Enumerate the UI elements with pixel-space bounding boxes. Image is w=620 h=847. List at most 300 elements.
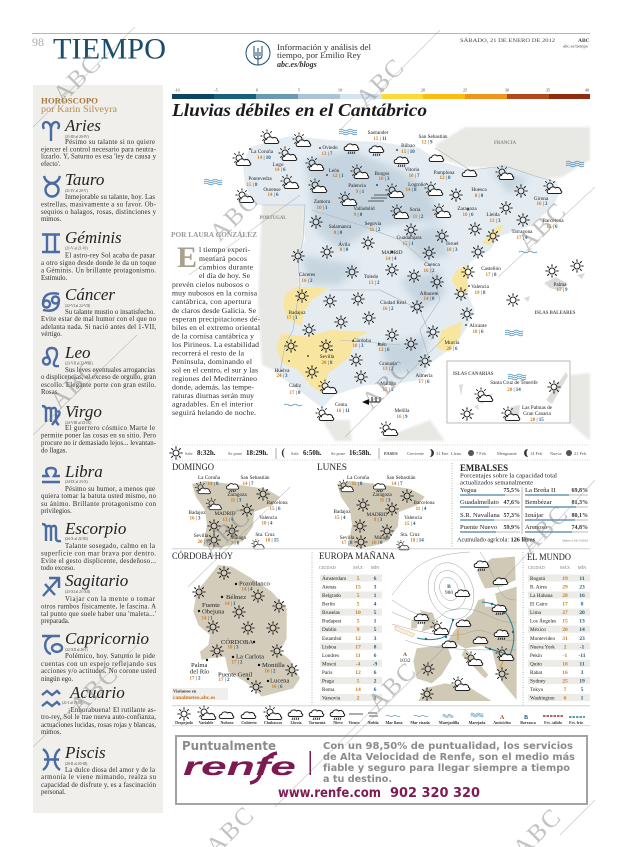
el mundo table: 14: [579, 627, 585, 633]
lunes labels: Málaga: [374, 535, 390, 541]
embalses subtitle: Porcentajes sobre la capacidad total: [460, 472, 557, 480]
embalses table: 74,8%: [572, 525, 588, 531]
main weather map of Spain: [204, 127, 590, 441]
map: cloud shading: [300, 150, 530, 375]
sign: Virgo: Virgo: [65, 402, 102, 421]
cordoba heading: CÓRDOBA HOY: [172, 550, 233, 562]
article text: cambios durante: [199, 262, 254, 272]
map: sea labels: [259, 141, 576, 316]
el mundo table: Sydney: [530, 678, 546, 684]
map: city labels: 13 | 2: [382, 367, 394, 372]
map: city labels: MADRID: [381, 250, 403, 256]
date block: ABC: [578, 38, 590, 44]
embalses table: [460, 487, 588, 534]
article text: [172, 245, 260, 417]
europa table: 5: [357, 593, 360, 599]
map: city labels: 15 | 10: [401, 150, 415, 155]
europe lens: [395, 626, 415, 637]
ad tagline: Puntualmente: [182, 739, 276, 753]
sign: Escorpio: (24-X al 22-XI): [65, 537, 89, 541]
cordoba labels: 17 | 2: [189, 676, 201, 682]
europa table: Budapest: [322, 619, 342, 625]
sign: Geminis: Géminis: [65, 228, 122, 247]
lunes labels: 15 | 4: [334, 516, 346, 521]
map: city labels: Ourense: [263, 187, 281, 193]
el mundo table: 3: [581, 670, 584, 676]
panel: horoscope: [33, 85, 163, 813]
map: city labels: Huesca: [471, 187, 487, 193]
ABC watermarks: ABC: [363, 657, 423, 717]
article text: Península, dominando el: [172, 357, 252, 366]
map: city labels: 14 | 0: [423, 297, 435, 302]
map: city labels: Tarragona: [512, 229, 533, 235]
lunes labels: Sta. Cruz: [400, 532, 420, 538]
sun and moon strip: 16:58h.: [349, 449, 371, 457]
article text: agradables. En el interior: [172, 400, 253, 408]
el mundo table: 8: [581, 602, 584, 608]
lunes labels: 14 | 7: [391, 482, 403, 487]
sun and moon strip: 8:32h.: [197, 449, 216, 457]
cordoba labels: CÓRDOBA: [221, 638, 253, 646]
sign: Aries: [41, 116, 157, 168]
map: city labels: Bilbao: [401, 143, 415, 149]
sign: Leo: Sus leves eventuales arrogancias: [65, 367, 155, 374]
domingo labels: La Coruña: [198, 475, 221, 481]
el mundo table: Bogotá: [530, 576, 546, 582]
cordoba icons: [192, 566, 299, 694]
map: city labels: 12 | 1: [332, 174, 344, 179]
map: city labels: Sevilla: [320, 354, 335, 360]
sign: Geminis: (21-V al 21-VI): [65, 246, 88, 250]
legend of symbols: Anticiclón: [493, 720, 512, 725]
map: city labels: 17 | 9: [556, 288, 568, 293]
callout: canal meteo: [172, 688, 228, 701]
icon: fog lines: [368, 195, 390, 201]
article text: el día de hoy. Se: [199, 271, 251, 280]
sun and moon strip: Se pone: [331, 451, 345, 456]
map: city labels: 17 | 8: [485, 273, 497, 278]
el mundo table: 28: [562, 593, 568, 599]
cordoba labels: 18 | 3: [227, 646, 239, 650]
cordoba labels: 16 | 2: [264, 670, 276, 674]
map: city labels: Albacete: [420, 291, 439, 297]
domingo labels: Valencia: [259, 515, 278, 521]
europa table: MÍN: [371, 565, 379, 570]
sign: Leo: Rosas.: [41, 389, 59, 396]
sign: Capricornio: (22-XII al 20-I): [65, 648, 88, 652]
cordoba labels: 14 | 1: [224, 602, 236, 607]
sign: Virgo: [41, 402, 157, 454]
panel: Cordoba hoy: [172, 550, 300, 701]
sign: Sagitario: tal punto que suele haber una 'maleta...': [41, 611, 156, 618]
embalses table: Iznájar: [525, 512, 544, 519]
sun and moon strip: Creciente: [407, 451, 424, 456]
date block: [460, 36, 590, 48]
map: city labels: Guadalajara: [396, 235, 422, 241]
sign: Tauro: Inmejorable su talante, hoy. Las: [65, 194, 155, 201]
lunes labels: Sevilla: [340, 535, 355, 541]
sign: Cancer: Su talante mustio o insatisfecho.: [65, 309, 155, 316]
el mundo table: 15: [562, 619, 568, 625]
el mundo table: Washington: [530, 696, 555, 702]
map: city labels: Ceuta: [335, 402, 348, 408]
el mundo table: 16: [562, 670, 568, 676]
map: city labels: 16 | 11: [336, 409, 350, 414]
legend of symbols: Frt. cálido: [544, 720, 562, 725]
europe pressure labels: 1032: [400, 658, 411, 664]
article text: sol en el centro, el sur y las: [172, 366, 258, 374]
embalses total: [457, 536, 588, 544]
europa table: Estambul: [322, 636, 342, 642]
embalses table: 75,5%: [504, 488, 520, 494]
domingo labels: Badajoz: [188, 510, 206, 516]
map: city labels: San Sebastián: [419, 134, 448, 140]
lunes labels: [334, 475, 435, 546]
domingo labels: MADRID: [214, 511, 236, 517]
el mundo table: 11: [579, 661, 585, 667]
sign: Tauro: [41, 170, 157, 223]
el mundo table: 16: [579, 593, 585, 599]
temperature colour scale: 10: [338, 88, 342, 92]
date block: abc.es/tiempo: [563, 44, 589, 48]
sign: Tauro: (21-IV al 20-V): [65, 189, 88, 193]
sign: Leo: o displicencias, el exceso de orgullo, gran: [41, 374, 157, 381]
map: city labels: Segovia: [365, 221, 382, 227]
sign: Geminis: [41, 228, 156, 282]
ABC watermarks: ABC: [205, 187, 265, 247]
europa table: 5: [374, 627, 377, 633]
map: city labels: 13 | 6: [378, 348, 390, 353]
map: city labels: 8 | 0: [475, 194, 484, 199]
map: city labels: 14 | 6: [267, 193, 279, 198]
lunes labels: 17 | 8: [341, 541, 353, 546]
icon: wind arrow: [362, 397, 380, 405]
map: city labels: Vitoria: [405, 167, 420, 173]
sign: Tauro: sequios o halagos, rosas, distinciones y: [41, 209, 157, 216]
map: city labels: 19 | 8: [474, 291, 486, 296]
sign: Capricornio: cuentas con un espejo reflejando sus: [41, 661, 156, 668]
lunes heading: LUNES: [317, 463, 347, 473]
ad copy: a tu destino.: [323, 774, 392, 785]
sign: Aries: lizarlo. Y, Saturno es esa 'ley de causa y: [41, 154, 157, 161]
map: city labels: Almería: [416, 373, 433, 379]
legend of symbols: A: [500, 715, 505, 721]
temperature colour scale: 5: [298, 88, 300, 92]
sign: Tauro: estrellas, masivamente a su favor. Ob-: [41, 202, 157, 208]
map: city labels: 18 | 3: [352, 344, 364, 349]
embalses total: Datos a 16/1/2012: [562, 538, 588, 542]
lunes labels: San Sebastián: [387, 475, 416, 481]
map: city labels: Zaragoza: [457, 206, 477, 212]
domingo heading: DOMINGO: [172, 463, 214, 473]
ad logo: [183, 751, 296, 783]
map: city labels: 16 | 2: [423, 269, 435, 274]
domingo labels: San Sebastián: [241, 475, 270, 481]
sign: Leo: [41, 343, 157, 396]
cordoba labels: Bélmez: [226, 594, 246, 601]
el mundo table: México: [530, 627, 546, 633]
lunes labels: 11 | 4: [416, 507, 427, 512]
europa table: 5: [374, 610, 377, 616]
lunes labels: 16 | 8: [371, 541, 383, 546]
sign: Acuario: (21-I al 19-II): [62, 701, 83, 705]
map: city labels: Soria: [410, 207, 421, 213]
legend of symbols: Despejado: [175, 720, 193, 725]
legend of symbols: Frt. frío: [569, 720, 583, 725]
el mundo table: Los Ángeles: [530, 617, 556, 625]
embalses heading: EMBALSES: [460, 464, 508, 474]
cordoba labels: Fuente: [202, 602, 220, 609]
europe pressure labels: A: [403, 652, 407, 658]
horoscope heading: [41, 96, 117, 114]
cordoba labels: 17 | 2: [218, 678, 230, 683]
europa table: 5: [357, 576, 360, 582]
sign: Tauro: Tauro: [65, 170, 104, 189]
cordoba labels: 14 | 4: [241, 588, 253, 592]
sun and moon strip: 21 Feb.: [574, 451, 587, 456]
sign: Cancer: [41, 285, 157, 338]
el mundo table: Quito: [530, 661, 542, 667]
map: city labels: 17 | 5: [382, 388, 394, 393]
el mundo table: 20: [579, 610, 585, 616]
domingo labels: Sevilla: [194, 533, 209, 539]
europa table: Bruselas: [322, 610, 340, 616]
sign: Piscis: capacidad de disfrute y, es a fascinación: [41, 782, 157, 789]
sign: Capricornio: ningún ego.: [41, 676, 73, 683]
map: city labels: Valencia: [471, 284, 490, 290]
map: Spanish mainland: [243, 136, 560, 408]
map: city labels: 17 | 1: [286, 316, 298, 321]
sign: Libra: Libra: [64, 462, 103, 481]
map: city labels: Santander: [368, 130, 389, 136]
embalses subtitle: [460, 472, 557, 486]
sign: Libra: Pésimo su humor, a menos que: [65, 486, 155, 493]
ABC watermarks: ABC: [48, 49, 108, 109]
sign: Capricornio: acciones y/o actitudes. No corone usted: [41, 668, 157, 675]
map: city labels: Burgos: [375, 171, 389, 177]
europa table: 8: [374, 644, 377, 650]
cordoba labels: [189, 580, 289, 690]
ABC watermarks: ABC: [65, 660, 125, 720]
domingo labels: 14 | 8: [207, 482, 219, 487]
el mundo table: -1: [563, 653, 568, 659]
map: city labels: 16 | 2: [382, 307, 394, 312]
el mundo table: 23: [579, 584, 585, 590]
map: city labels: 10 | 3: [378, 177, 390, 182]
el mundo table: Rabat: [530, 670, 543, 676]
sign: Piscis: armonía le viene mimando, realza su: [41, 774, 157, 781]
article text: cantábrica, con apertura: [172, 297, 252, 306]
europa table: Roma: [322, 687, 335, 693]
el mundo table: MÍN: [578, 565, 586, 570]
article text: seguirá helando de noche.: [172, 408, 256, 417]
ad contact: [278, 786, 480, 801]
sign: Acuario: Acuario: [69, 683, 125, 702]
map: city labels: 15 | 6: [546, 225, 558, 230]
el mundo table: B. Aires: [530, 584, 547, 590]
map: city labels: 14 | 8: [405, 188, 417, 193]
map: city dots: [249, 147, 470, 362]
article text: muy nubosos en la cornisa: [172, 288, 258, 298]
article byline: POR LAURA GONZÁLEZ: [171, 231, 257, 239]
domingo labels: 20 | 7: [197, 540, 209, 545]
europa table: Belgrado: [322, 593, 341, 599]
map: city labels: 15 | 8: [246, 183, 258, 188]
europa table: Berlín: [322, 602, 335, 608]
el mundo heading: EL MUNDO: [527, 553, 571, 563]
map: city labels: Córdoba: [353, 338, 372, 344]
sign: Sagitario: preparada.: [41, 618, 70, 625]
map: Balearic islands: [524, 273, 585, 302]
panel: Canary Islands inset: 20 | 15: [530, 418, 544, 423]
europa table: 12: [355, 636, 361, 642]
panel: Canary Islands inset: Las Palmas de: [522, 405, 553, 411]
domingo labels: Barcelona: [266, 500, 288, 506]
domingo map: [192, 481, 280, 548]
el mundo table: MÁX: [560, 565, 571, 570]
el mundo table: 23: [579, 636, 585, 642]
europe pressure labels: [400, 584, 453, 664]
embalses table: S.R. Navallana: [460, 512, 500, 519]
map: city labels: 8 | 0: [340, 248, 349, 253]
sign: Sagitario: (23-XI al 21-XII): [65, 590, 91, 594]
temperature colour scale: -10: [174, 88, 180, 92]
sign: Geminis: Estímulo.: [41, 275, 68, 282]
el mundo table: El Cairo: [530, 602, 548, 608]
sun and moon strip: Sale: [185, 451, 193, 456]
lunes labels: Valencia: [404, 515, 423, 521]
map: city labels: Oviedo: [322, 145, 338, 151]
lunes icons: [338, 480, 414, 550]
embalses table: Puente Nuevo: [460, 524, 498, 531]
sign: Aries: efecto'.: [41, 161, 61, 168]
article text: donde, además, las tempe-: [172, 382, 254, 392]
legend of symbols: Tormenta: [309, 720, 325, 725]
article text: raturas diurnas serán muy: [172, 391, 254, 400]
embalses table: 59,9%: [504, 525, 520, 531]
drop cap: E: [177, 241, 197, 274]
domingo labels: Málaga: [230, 535, 246, 541]
europa table: -4: [356, 661, 361, 667]
map: city labels: Barcelona: [542, 218, 564, 224]
domingo labels: 18 | 4: [261, 522, 273, 526]
sign: Acuario: tro-rey, Sol le trae nueva auto-confianza,: [41, 714, 156, 721]
map: city labels: Girona: [534, 196, 549, 202]
ABC watermarks: ABC: [513, 197, 573, 257]
lunes labels: 11 | 8: [352, 482, 363, 487]
header rule: [32, 33, 590, 34]
article text: recorrerá el resto de la: [172, 348, 245, 358]
lunes labels: 18 | 14: [410, 538, 424, 544]
blog text block: tiempo, por Emilio Rey: [277, 51, 361, 60]
legend of symbols: Marejada: [469, 720, 485, 725]
map: city labels: Cuenca: [424, 262, 440, 268]
el mundo table: 13: [579, 619, 585, 625]
map: sea labels: ISLAS BALEARES: [535, 311, 576, 316]
domingo labels: 16 | 3: [189, 516, 201, 522]
panel: Canary Islands inset: [447, 361, 570, 423]
cordoba labels: 17 | 2: [231, 660, 243, 666]
map: city labels: Zamora: [314, 199, 331, 205]
map: city labels: [246, 130, 568, 420]
legend of symbols: Cubierto: [241, 720, 257, 725]
domingo labels: 14 | 7: [242, 482, 254, 487]
europa table: 4: [374, 602, 377, 608]
europa table: CIUDAD: [319, 565, 336, 570]
el mundo table: 6: [564, 696, 567, 702]
map: city labels: Pontevedra: [248, 176, 272, 182]
sign: Aries: (21-III al 20-IV): [65, 135, 90, 139]
map: city labels: 13 | 7: [321, 152, 333, 157]
callout: canal meteo: Visítanos en: [173, 688, 197, 694]
cordoba labels: 16 | 6: [271, 685, 283, 690]
ABC watermarks: ABC: [351, 53, 411, 113]
sun and moon strip: 14 Feb.: [530, 451, 543, 456]
el mundo table: -1: [580, 644, 585, 650]
sign: Piscis: La dulce diosa del amor y de la: [65, 767, 155, 774]
domingo labels: 11 | 3: [231, 498, 242, 504]
el mundo table: Tokyo: [530, 687, 544, 693]
map: city labels: Ávila: [338, 240, 350, 248]
article text: biles en el extremo oriental: [172, 323, 260, 332]
ABC watermarks: ABC: [357, 355, 417, 415]
map: city labels: 14 | 4: [385, 257, 397, 262]
el mundo table: 29: [562, 584, 568, 590]
ABC watermarks: ABC: [197, 503, 257, 563]
embalses table: 57,3%: [504, 513, 520, 519]
cordoba labels: Palma: [191, 662, 208, 669]
sign: Libra: privilegios.: [41, 508, 72, 515]
lunes labels: MADRID: [366, 512, 388, 518]
lunes map: [337, 481, 425, 548]
map: city labels: 18 | 6: [472, 330, 484, 335]
el mundo table: Pekín: [530, 653, 542, 659]
sign: Libra: [41, 462, 157, 515]
temperature colour scale: 30: [505, 88, 509, 92]
europa table: 11: [355, 653, 361, 659]
europa table: 5: [357, 602, 360, 608]
lunes labels: 9 | 3: [374, 518, 383, 523]
el mundo table: 11: [579, 576, 585, 582]
domingo labels: 7 | 8: [231, 542, 240, 546]
sign: Piscis: personal.: [41, 789, 66, 796]
sign: Geminis: a otro signo desde donde le da un toque: [41, 260, 156, 267]
europe pressure labels: 980: [445, 590, 453, 596]
map: city labels: Badajoz: [288, 310, 306, 316]
embalses table: 47,6%: [504, 500, 520, 506]
map: city labels: 10 | 3: [446, 248, 458, 253]
sign: Sagitario: Sagitario: [65, 571, 128, 590]
map: city labels: León: [329, 168, 340, 174]
map: city labels: Melilla: [395, 408, 410, 414]
europa table: 3: [374, 636, 377, 642]
europa table: Varsovia: [322, 696, 341, 702]
map: city labels: 9 | 0: [354, 213, 363, 218]
title: TIEMPO: [53, 32, 166, 66]
map: city labels: 17 | 8: [289, 391, 301, 396]
europa table: [319, 565, 382, 702]
panel: Canary Islands inset: Gran Canaria: [523, 411, 552, 417]
sign: Libra: (24-IX al 23-X): [65, 480, 89, 484]
blog text block: abc.es/blogs: [277, 60, 317, 69]
sign: Piscis: (20-II al 20-III): [65, 762, 88, 766]
sign: Virgo: El guerrero cósmico Marte le: [65, 425, 155, 432]
europe isobars: [392, 552, 516, 650]
article text: esperan precipitaciones dé-: [172, 314, 260, 324]
map: city labels: 10 | 6: [462, 213, 474, 218]
map: city labels: Granada: [379, 361, 397, 367]
map: city labels: Logroño: [408, 182, 426, 188]
